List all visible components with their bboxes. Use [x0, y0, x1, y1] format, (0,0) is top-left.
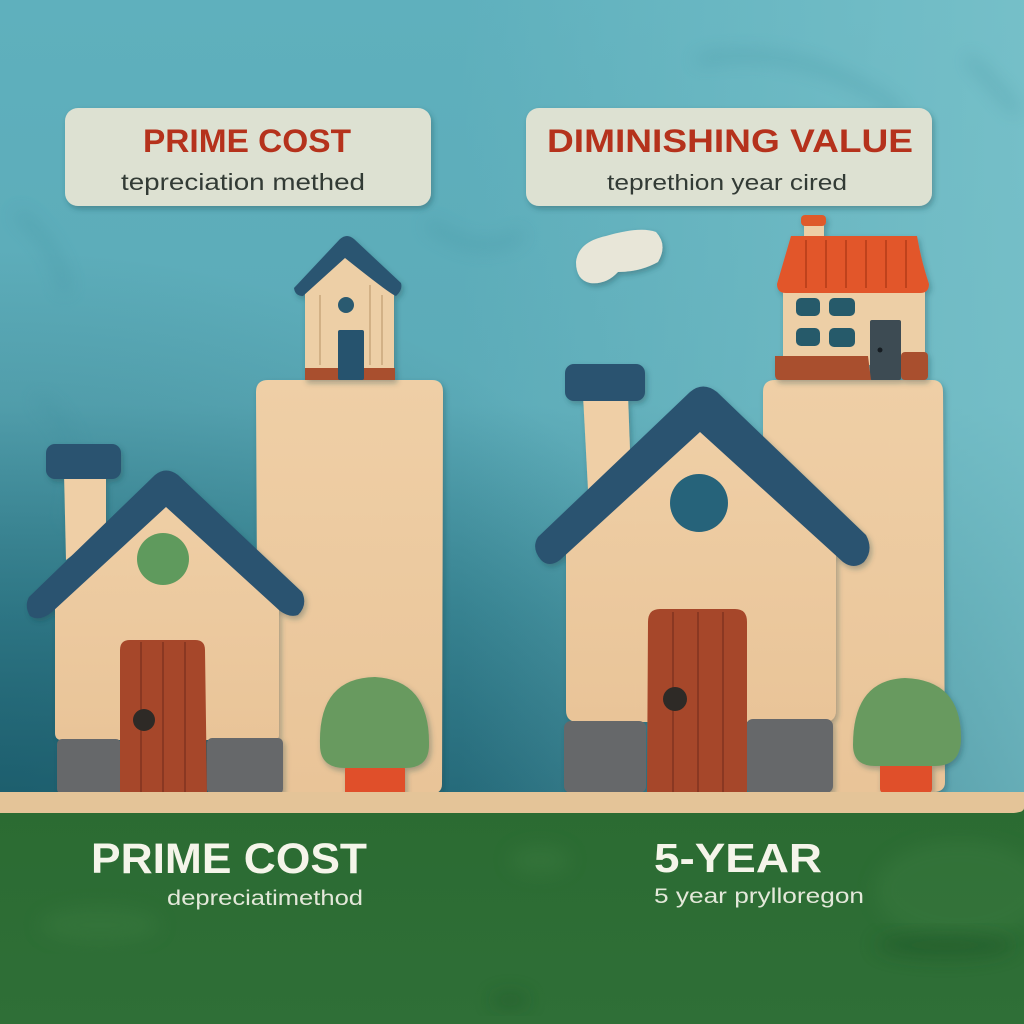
chimney: [583, 395, 630, 490]
cloud: [576, 230, 663, 283]
caption heading: 5-year: 5-YEAR: [654, 835, 822, 881]
chimney: [804, 222, 824, 240]
chimney: [64, 472, 106, 560]
round window: [670, 474, 728, 532]
large house left: [27, 444, 304, 795]
label heading: diminishing value: DIMINISHING VALUE: [547, 123, 913, 159]
label: diminishing value: [526, 108, 932, 206]
caption: prime cost: [91, 835, 367, 910]
shelf: [0, 792, 1024, 813]
walls: [55, 495, 279, 740]
background wall: [0, 0, 1024, 810]
label subtext: diminishing value: teprethion year cired: [607, 170, 847, 195]
right tall column: [763, 380, 945, 792]
windows: [796, 298, 855, 347]
caption subtext: 5-year: 5 year prylloregon: [654, 885, 864, 908]
tree right: [853, 678, 961, 793]
small house on right column: [775, 215, 929, 380]
roof: [27, 470, 304, 618]
door: [870, 320, 901, 380]
base stones: [57, 739, 121, 794]
door: [338, 330, 364, 380]
small house on left column: [294, 236, 401, 380]
brick base: [775, 356, 871, 380]
round window: [338, 297, 354, 313]
roof: [535, 386, 870, 566]
base stones: [564, 721, 646, 793]
walls: [783, 285, 925, 365]
caption: 5-year: [654, 835, 864, 908]
door: [647, 609, 747, 794]
roof: [294, 236, 401, 296]
ground: [0, 808, 1024, 1024]
caption heading: prime cost: PRIME COST: [91, 835, 367, 883]
walls: [566, 425, 836, 722]
round window: [137, 533, 189, 585]
label heading: prime cost: PRIME COST: [143, 123, 351, 159]
tree left: [320, 677, 429, 796]
caption subtext: prime cost: depreciatimethod: [167, 887, 363, 910]
label: prime cost: [65, 108, 431, 206]
door: [120, 640, 207, 795]
left tall column: [256, 380, 443, 794]
label subtext: prime cost: tepreciation methed: [121, 169, 365, 195]
roof: [777, 236, 929, 293]
large house right: [535, 364, 870, 794]
